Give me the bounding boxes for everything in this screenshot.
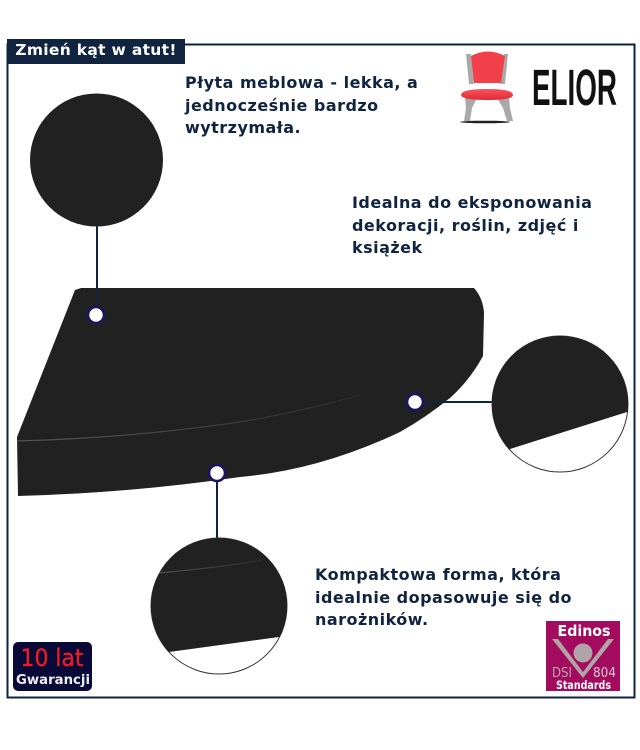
text: use: książek bbox=[352, 238, 423, 257]
title label: Zmień kąt w atut! bbox=[15, 41, 177, 59]
badge: 10 year warranty: 10 lat bbox=[20, 644, 84, 672]
marker dot: shelf front bbox=[209, 465, 225, 481]
text: material: Płyta meblowa - lekka, a bbox=[185, 73, 418, 92]
badge: Edinos standards: 804 bbox=[593, 666, 616, 681]
badge: Edinos standards: DSI bbox=[552, 666, 572, 681]
connector: right circle bbox=[424, 401, 492, 403]
detail circle: bottom bbox=[150, 536, 290, 674]
badge: 10 year warranty bbox=[13, 642, 92, 691]
corner shelf bbox=[17, 288, 484, 496]
badge: 10 year warranty: Gwarancji bbox=[16, 673, 90, 688]
detail circle: top bbox=[30, 94, 163, 226]
marker dot: shelf right bbox=[407, 394, 423, 410]
badge: Edinos standards bbox=[546, 621, 620, 692]
text: material: wytrzymała. bbox=[185, 118, 301, 137]
title label bbox=[7, 39, 185, 64]
badge: Edinos standards: Edinos bbox=[558, 622, 611, 640]
text: form: idealnie dopasowuje się do bbox=[315, 588, 572, 606]
connector: bottom circle bbox=[216, 481, 218, 539]
text: use bbox=[352, 193, 592, 257]
text: material: jednocześnie bardzo bbox=[185, 96, 379, 114]
marker dot: shelf top bbox=[88, 307, 104, 323]
detail circle: right bbox=[490, 336, 630, 472]
connector: top circle bbox=[96, 226, 98, 306]
text: use: dekoracji, roślin, zdjęć i bbox=[352, 216, 579, 234]
text: form: Kompaktowa forma, która bbox=[315, 565, 561, 584]
icon: chair logo bbox=[460, 52, 513, 123]
badge: Edinos standards: Standards bbox=[556, 678, 611, 692]
text: form: narożników. bbox=[315, 610, 429, 629]
text: material bbox=[184, 73, 418, 137]
text: use: Idealna do eksponowania bbox=[352, 193, 592, 212]
text: form bbox=[315, 565, 572, 629]
